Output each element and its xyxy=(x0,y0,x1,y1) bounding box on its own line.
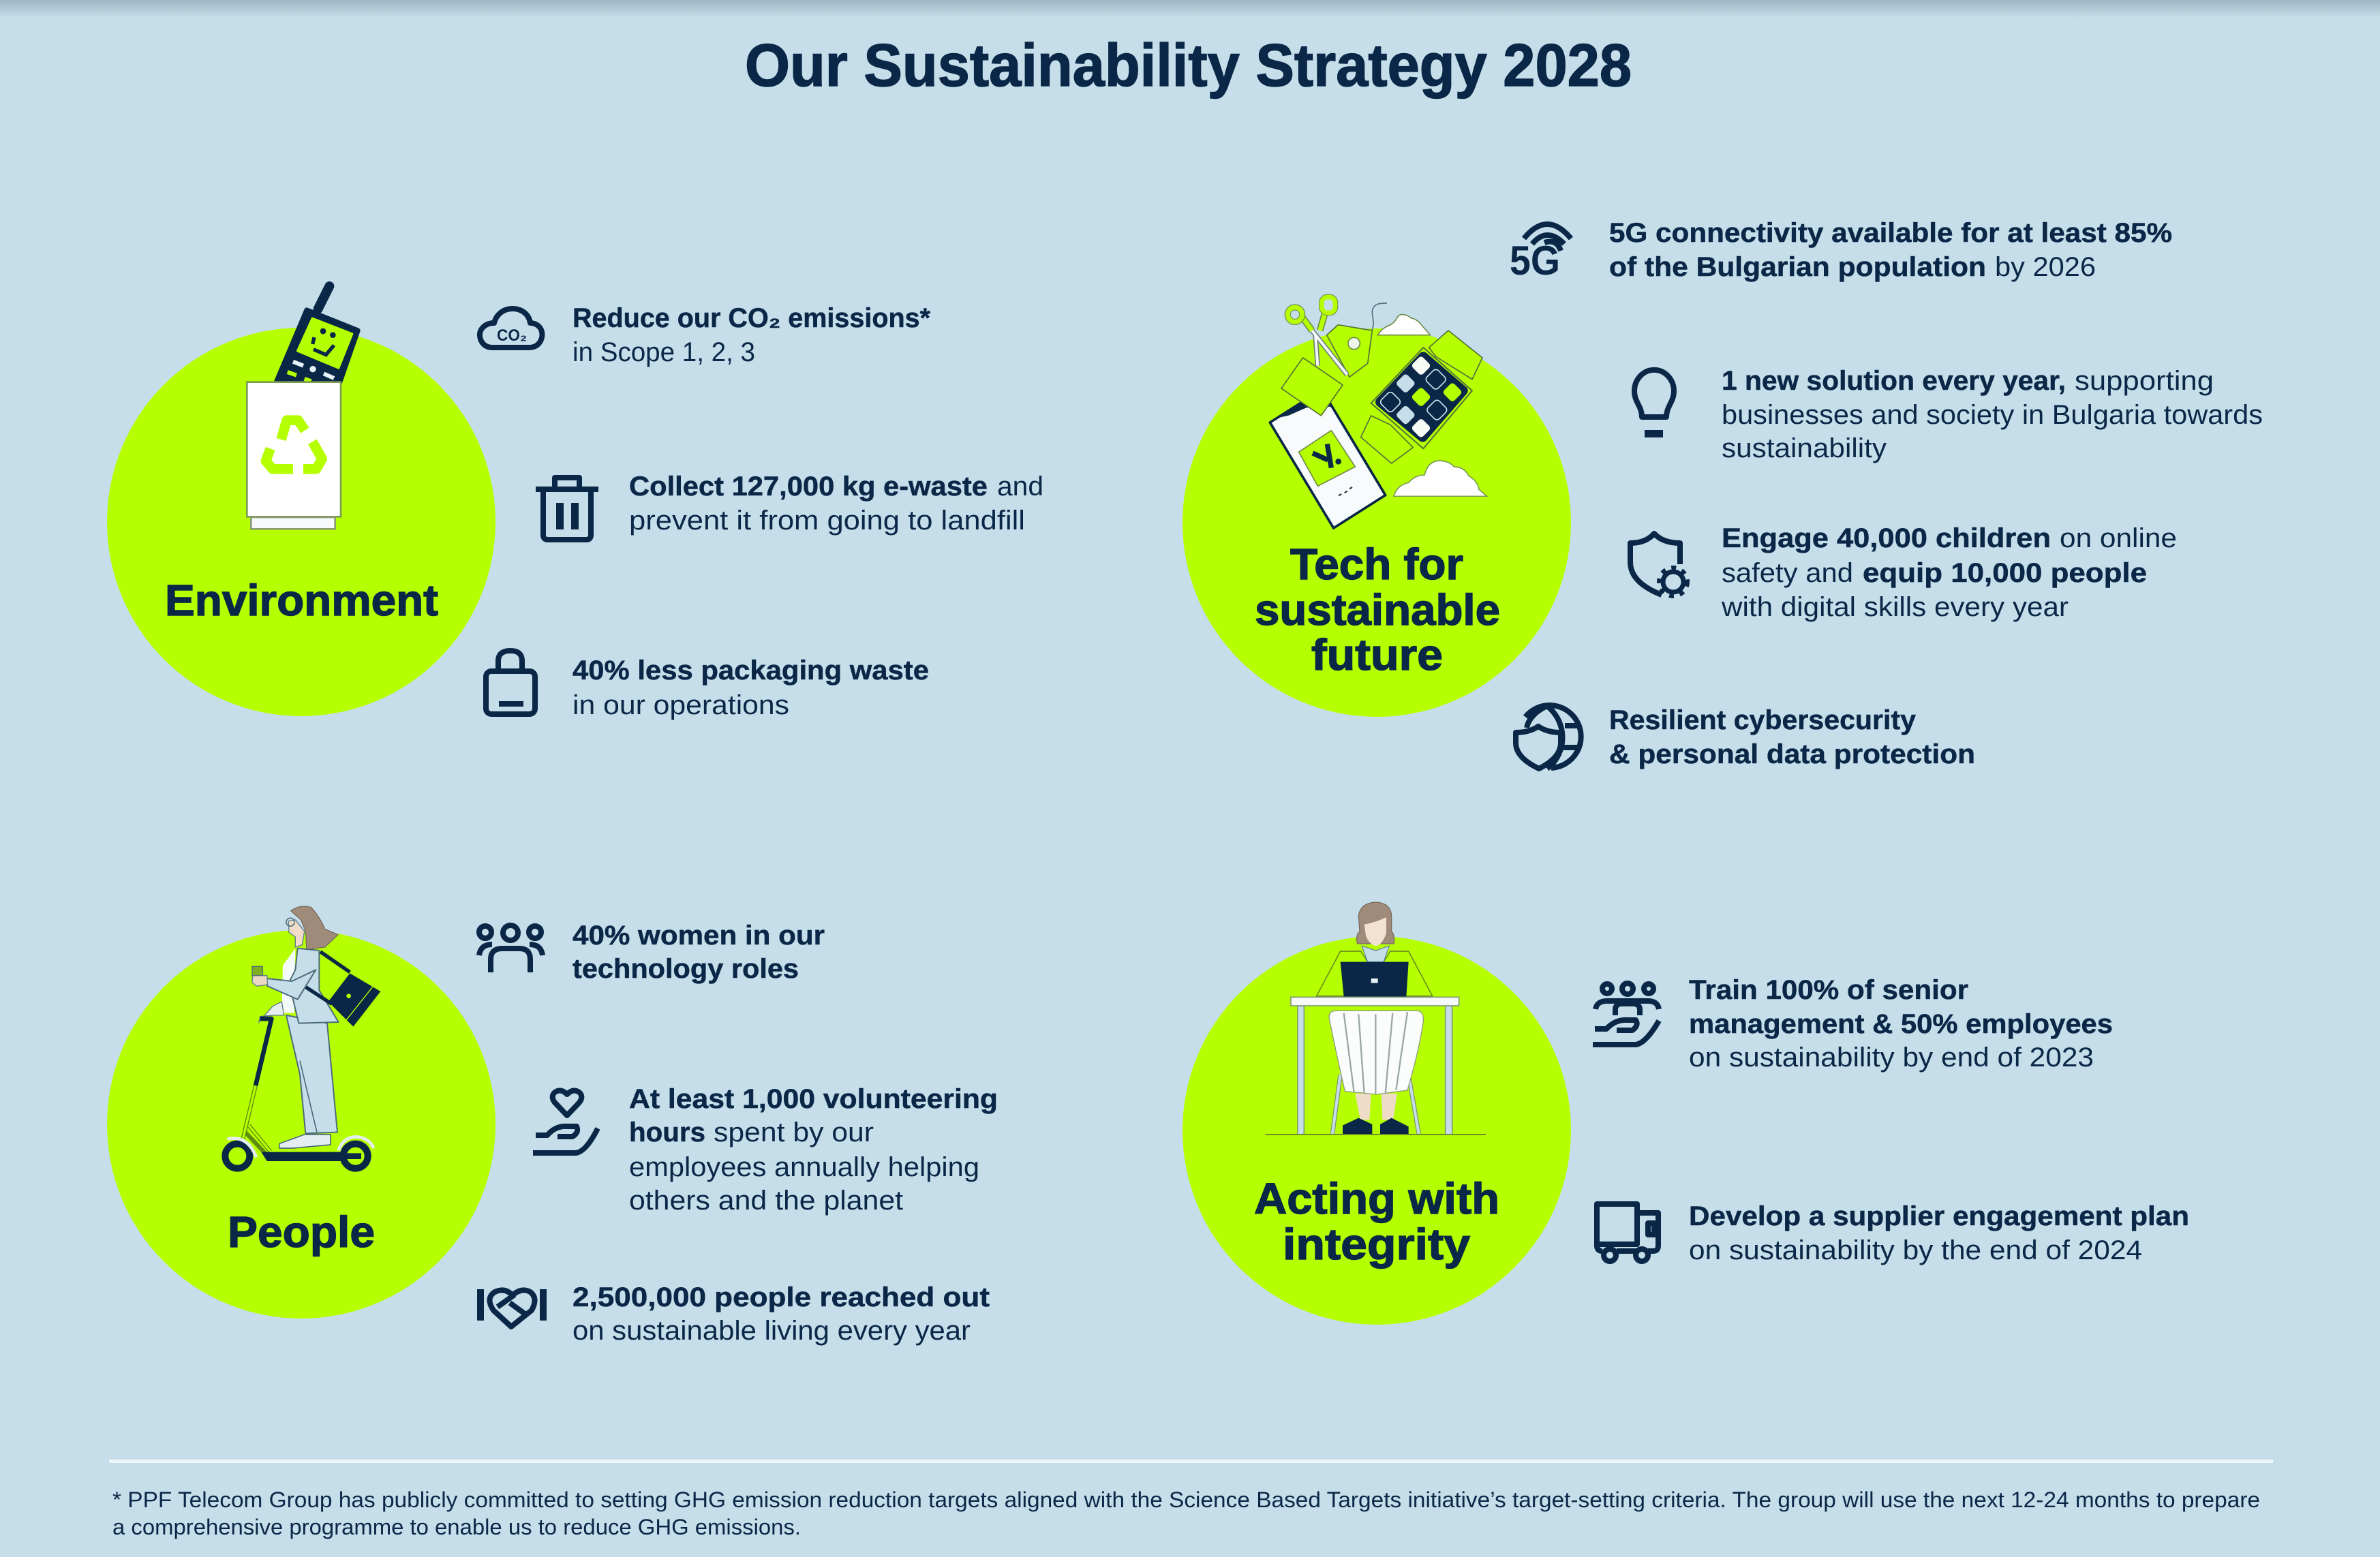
icon: handshake heart xyxy=(477,1289,547,1327)
circle: Tech xyxy=(1183,328,1571,717)
text: e-waste: prevent it from going to landfill xyxy=(629,506,1025,536)
icon: 5G: 5G xyxy=(1510,238,1560,283)
heading: Environment xyxy=(165,576,438,625)
heading: Tech for xyxy=(1290,540,1463,589)
footnote xyxy=(112,1487,2260,1539)
text: children: safety and xyxy=(1722,558,1853,588)
heading: sustainable xyxy=(1255,585,1500,634)
text: training: Train 100% of senior xyxy=(1689,975,1968,1005)
panel: Acting with integrity xyxy=(1183,902,2189,1325)
footnote: a comprehensive programme to enable us to reduce GHG emissions. xyxy=(112,1515,801,1539)
icon: shield with gear xyxy=(1630,534,1688,596)
text: packaging: 40% less packaging waste xyxy=(573,656,929,685)
text: people reached xyxy=(573,1282,990,1346)
text: supplier engagement: on sustainability by the end of 2024 xyxy=(1689,1235,2142,1265)
icon: bag xyxy=(486,651,535,714)
text: volunteering: others and the planet xyxy=(629,1186,903,1216)
text: women: 40% women in our xyxy=(573,921,825,951)
illustration: woman at desk with laptop xyxy=(1266,902,1486,1135)
text: training xyxy=(1689,975,2113,1073)
text: new solution: supporting xyxy=(2075,366,2214,396)
text: packaging xyxy=(573,656,929,720)
text: new solution: sustainability xyxy=(1722,433,1887,463)
icon: truck xyxy=(1597,1204,1658,1261)
text: new solution xyxy=(1722,366,2263,463)
text: children: equip 10,000 people xyxy=(1863,558,2147,588)
illustration: phone in recycling bin xyxy=(247,286,358,529)
text: CO2 emissions xyxy=(573,303,930,367)
text: women xyxy=(573,921,825,984)
icon: 5G xyxy=(1510,224,1571,283)
text: new solution: 1 new solution every year, xyxy=(1722,366,2066,396)
panel: People xyxy=(107,906,998,1346)
text: people reached: on sustainable living every year xyxy=(573,1316,971,1346)
text: 5G connectivity: of the Bulgarian population xyxy=(1609,252,1986,282)
title: Our Sustainability Strategy 2028 xyxy=(745,31,1632,99)
text: people reached: 2,500,000 people reached out xyxy=(573,1282,990,1312)
heading: People xyxy=(228,1207,375,1257)
heading: integrity xyxy=(1283,1220,1470,1269)
panel: Tech for sustainable future xyxy=(1183,218,2263,769)
text: women: technology roles xyxy=(573,954,799,984)
icon: trash bin xyxy=(536,478,598,540)
icon: CO2 cloud xyxy=(480,309,542,348)
text: volunteering xyxy=(629,1084,998,1216)
heading xyxy=(1255,540,1500,679)
text: training: management & 50% employees xyxy=(1689,1009,2113,1039)
text: 5G connectivity xyxy=(1609,218,2172,282)
text: supplier engagement xyxy=(1689,1201,2189,1265)
text: e-waste: Collect 127,000 kg e-waste xyxy=(629,472,988,502)
icon: CO2 cloud: CO₂ xyxy=(497,326,527,345)
illustration: woman on scooter xyxy=(225,906,380,1169)
footnote: * PPF Telecom Group has publicly committed to setting GHG emission reduction targets aligned with the Science Based Targets initiative’s target-setting criteria. The group will use the next 12-24 months to prepare xyxy=(112,1487,2260,1512)
text: CO2 emissions: Reduce our CO₂ emissions* xyxy=(573,303,930,333)
panel: Environment xyxy=(107,286,1043,720)
text: children: Engage 40,000 children xyxy=(1722,523,2051,553)
icon: group of people xyxy=(479,925,543,972)
text: children: on online xyxy=(2060,523,2177,553)
heading: future xyxy=(1311,630,1443,679)
icon: globe with shield xyxy=(1516,705,1581,769)
icon: people in hand xyxy=(1593,983,1659,1045)
text: e-waste: and xyxy=(997,472,1043,502)
text: volunteering: employees annually helping xyxy=(629,1152,979,1182)
text: children: with digital skills every year xyxy=(1721,592,2069,622)
icon: heart in hand xyxy=(533,1090,598,1153)
text: volunteering: spent by our xyxy=(714,1117,874,1147)
text: volunteering: hours xyxy=(629,1117,705,1147)
circle: Integrity xyxy=(1183,936,1571,1325)
text: training: on sustainability by end of 2023 xyxy=(1689,1043,2094,1073)
heading xyxy=(1254,1174,1499,1269)
text: CO2 emissions: in Scope 1, 2, 3 xyxy=(573,337,755,367)
text: cybersecurity xyxy=(1609,705,1975,769)
text: packaging: in our operations xyxy=(573,690,789,720)
illustration: phone, watch, tags and clouds xyxy=(1270,294,1487,528)
text: children xyxy=(1721,523,2177,622)
text: supplier engagement: Develop a supplier engagement plan xyxy=(1689,1201,2189,1231)
circle: People xyxy=(107,930,495,1319)
text: volunteering: At least 1,000 volunteering xyxy=(629,1084,998,1114)
icon: light bulb xyxy=(1634,370,1674,437)
text: 5G connectivity: by 2026 xyxy=(1995,252,2096,282)
text: e-waste xyxy=(629,472,1043,536)
circle: Environment xyxy=(107,328,495,716)
text: cybersecurity: Resilient cybersecurity xyxy=(1609,705,1917,735)
text: new solution: businesses and society in Bulgaria towards xyxy=(1722,400,2263,430)
text: cybersecurity: & personal data protection xyxy=(1609,739,1975,769)
text: 5G connectivity: 5G connectivity available for at least 85% xyxy=(1609,218,2172,248)
heading: Acting with xyxy=(1254,1174,1499,1223)
